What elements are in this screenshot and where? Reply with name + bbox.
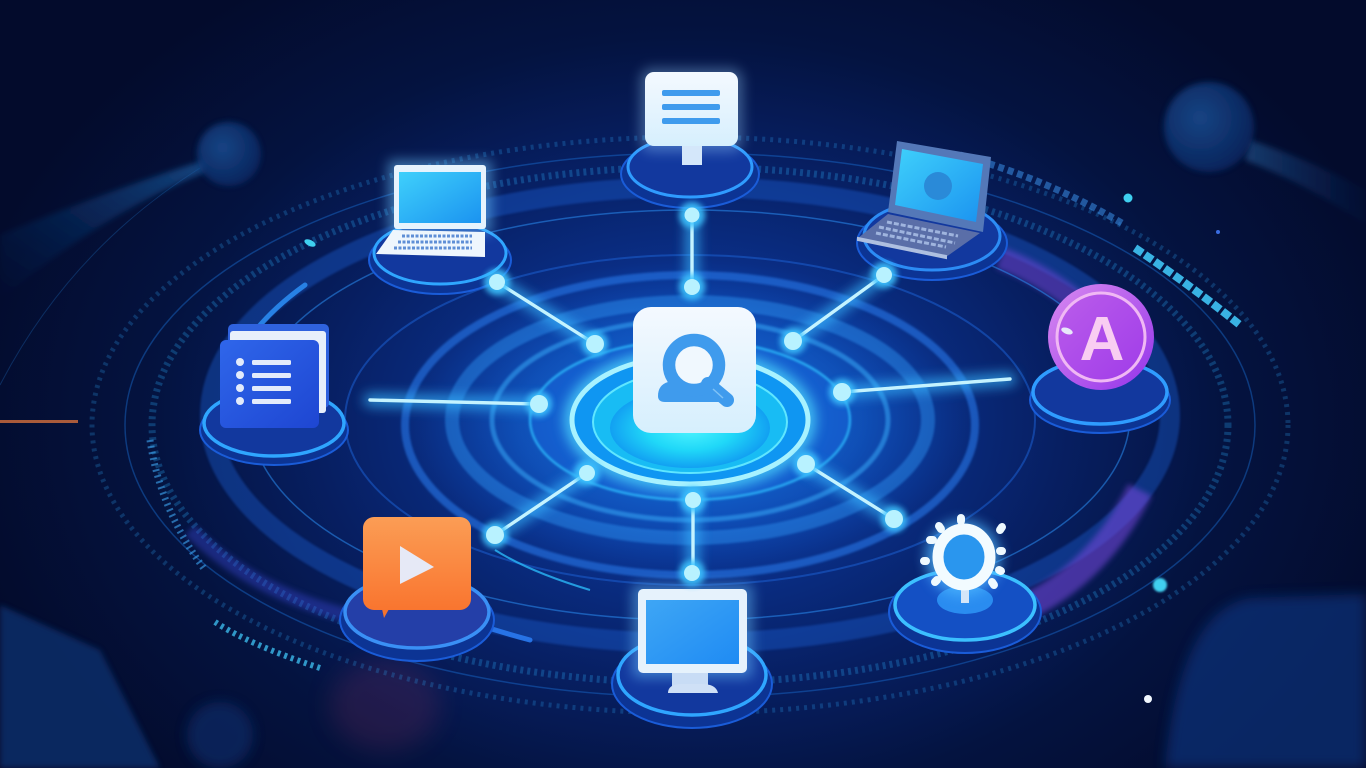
sparkles [303,194,1220,703]
icon: letter A coin [1048,284,1154,390]
connector nodes [482,202,907,586]
central glow [400,260,980,580]
platform [1030,360,1170,433]
platform [857,202,1007,280]
icon: letter A coin: A [1080,305,1124,374]
icon: gear [924,518,1002,603]
highlight arcs [150,155,1240,668]
hub card [633,307,756,433]
icon: monitor [632,584,753,693]
icon: laptop [376,160,492,257]
icon: magnifier [658,340,727,402]
icon: message card [640,68,743,165]
node: top left laptop [369,160,511,294]
connectors [370,215,1010,573]
platform [369,222,511,294]
inner rings [405,275,975,575]
platform [621,137,759,208]
concentric orbit rings [92,137,1288,713]
platform [612,635,772,728]
node: right letter badge [1030,284,1170,433]
node: top document [621,68,759,208]
platform [889,570,1041,653]
central hub [572,307,808,484]
node: lower right gear [889,518,1041,653]
platform [340,576,494,661]
platform [200,390,348,465]
node: top right laptop [857,141,1007,280]
node: left list [200,324,348,465]
icon: play tile [363,517,471,618]
icon: dark laptop [858,141,991,258]
icon: list folder [220,324,329,428]
node: bottom monitor [612,584,772,728]
node: lower left video [340,517,494,661]
